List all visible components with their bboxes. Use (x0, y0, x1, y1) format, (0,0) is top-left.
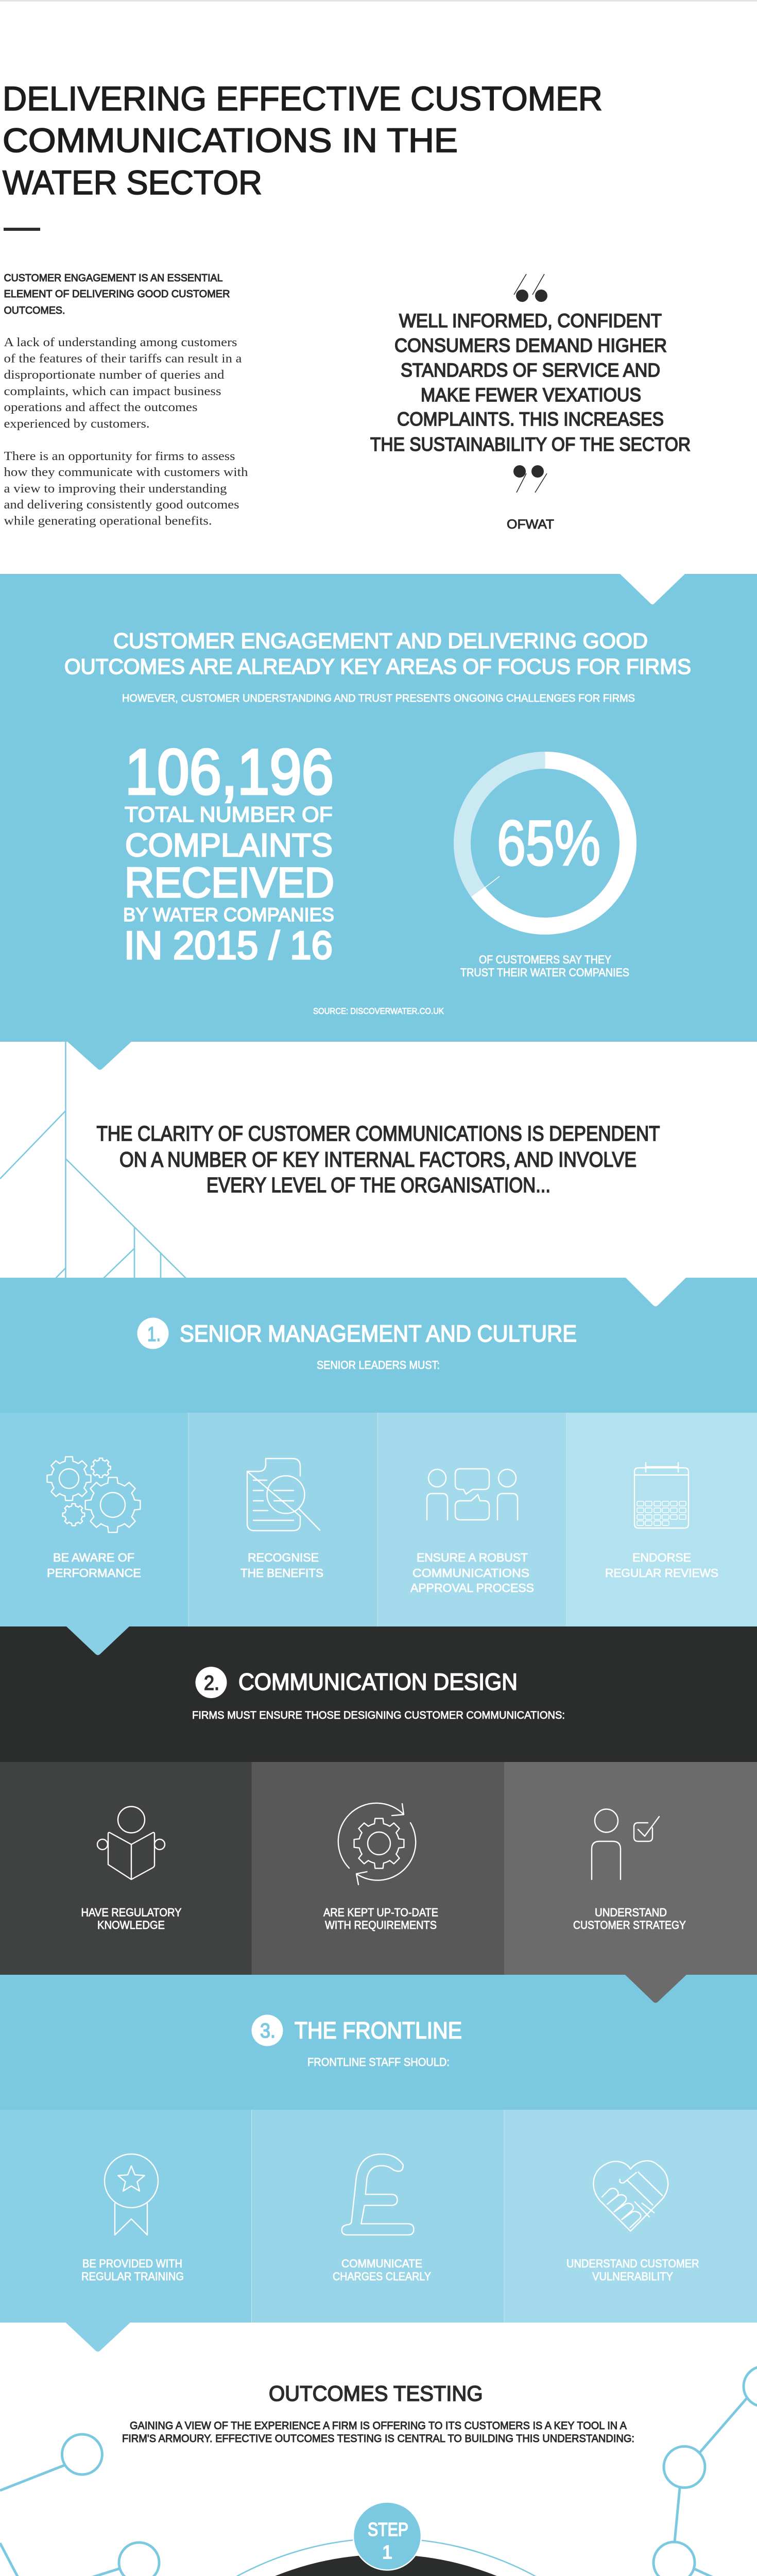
intro text block: how they communicate with customers with (4, 466, 248, 479)
intro text block (4, 273, 248, 528)
icon: number 2: 2. (204, 1672, 219, 1694)
donut chart: 65%: TRUST THEIR WATER COMPANIES (460, 966, 629, 979)
card: endorse regular reviews: REGULAR REVIEWS (605, 1566, 718, 1580)
panel: senior management and culture (0, 1277, 757, 1627)
complaints statistic: RECEIVED (125, 859, 334, 906)
complaints statistic (123, 737, 334, 968)
icon: number 3: 3. (260, 2020, 276, 2042)
complaints statistic: TOTAL NUMBER OF (125, 802, 333, 826)
card: robust approval process: ENSURE A ROBUST (417, 1551, 528, 1564)
icon: people in conversation (427, 1469, 518, 1520)
card: be aware of performance: BE AWARE OF (53, 1551, 134, 1564)
heading: outcomes testing: FIRM'S ARMOURY. EFFECTIVE OUTCOMES TESTING IS CENTRAL TO BUILDING THIS UNDERSTANDING: (122, 2433, 634, 2445)
title: DELIVERING EFFECTIVE CUSTOMER (3, 79, 603, 117)
icon: document with magnifier (247, 1459, 320, 1531)
card: recognise the benefits: RECOGNISE (248, 1551, 319, 1564)
quote: MAKE FEWER VEXATIOUS (421, 384, 641, 405)
icon: number 1: 1. (147, 1323, 161, 1346)
card: be aware of performance (0, 1413, 188, 1627)
heading: CUSTOMER ENGAGEMENT AND DELIVERING GOOD (113, 629, 648, 653)
card: recognise the benefits: THE BENEFITS (240, 1566, 323, 1580)
text block: clarity statement: ON A NUMBER OF KEY INTERNAL FACTORS, AND INVOLVE (119, 1148, 636, 1172)
quote: WELL INFORMED, CONFIDENT (399, 310, 662, 331)
wedge: step 1 (211, 2554, 561, 2576)
card: kept up to date (251, 1762, 504, 1975)
intro text block: There is an opportunity for firms to assess (4, 450, 235, 463)
intro text block: operations and affect the outcomes (4, 401, 197, 414)
card: robust approval process (377, 1413, 566, 1627)
icon: calendar (634, 1463, 689, 1528)
quote: CONSUMERS DEMAND HIGHER (394, 335, 667, 356)
card: kept up to date: WITH REQUIREMENTS (325, 1919, 437, 1931)
card: endorse regular reviews (566, 1413, 757, 1627)
step 1 badge: 1 (382, 2541, 392, 2563)
intro text block: experienced by customers. (4, 417, 149, 431)
card: regulatory knowledge: KNOWLEDGE (97, 1919, 165, 1931)
card: robust approval process: COMMUNICATIONS (412, 1566, 529, 1580)
complaints statistic: COMPLAINTS (125, 827, 333, 863)
card: customer vulnerability (504, 2110, 757, 2323)
card: regulatory knowledge (0, 1762, 251, 1975)
donut chart: 65% (460, 760, 629, 979)
icon: number 3 (251, 2014, 283, 2046)
intro text block: disproportionate number of queries and (4, 368, 225, 382)
quote: COMPLAINTS. THIS INCREASES (397, 409, 664, 430)
text block: clarity statement (97, 1122, 660, 1197)
card: customer strategy: CUSTOMER STRATEGY (573, 1919, 686, 1931)
step 1 badge: STEP (368, 2519, 408, 2540)
complaints statistic: BY WATER COMPANIES (123, 904, 334, 925)
intro text block: ELEMENT OF DELIVERING GOOD CUSTOMER (4, 289, 230, 300)
heading: COMMUNICATION DESIGN (238, 1669, 518, 1695)
intro text block: of the features of their tariffs can result in a (4, 352, 242, 366)
text block: clarity statement: EVERY LEVEL OF THE ORGANISATION... (207, 1173, 550, 1197)
card: regular training: BE PROVIDED WITH (82, 2257, 182, 2270)
complaints statistic: 106,196 (125, 737, 334, 808)
card: customer vulnerability: UNDERSTAND CUSTOMER (566, 2257, 699, 2270)
icon: person with checkbox (592, 1809, 659, 1879)
icon: opening quote marks (514, 274, 547, 302)
card: be aware of performance: PERFORMANCE (47, 1566, 141, 1580)
quote (370, 274, 691, 532)
icon: heart handshake (593, 2161, 668, 2231)
card: regular training (0, 2110, 251, 2351)
panel: communication design: FIRMS MUST ENSURE THOSE DESIGNING CUSTOMER COMMUNICATIONS: (192, 1709, 565, 1721)
panel: senior management and culture: SENIOR LEADERS MUST: (317, 1359, 440, 1371)
card: communicate charges: CHARGES CLEARLY (333, 2270, 431, 2283)
panel: communication design (0, 1626, 757, 1975)
intro text block: and delivering consistently good outcomes (4, 498, 239, 512)
card: regular training: REGULAR TRAINING (81, 2270, 184, 2283)
panel: the frontline: FRONTLINE STAFF SHOULD: (307, 2056, 450, 2069)
card: customer vulnerability: VULNERABILITY (592, 2270, 673, 2283)
heading: SENIOR MANAGEMENT AND CULTURE (180, 1320, 577, 1347)
icon: rosette (105, 2154, 158, 2235)
icon: closing quote marks (513, 465, 547, 493)
text block: clarity statement: THE CLARITY OF CUSTOMER COMMUNICATIONS IS DEPENDENT (97, 1122, 660, 1145)
title (3, 79, 603, 201)
quote: OFWAT (507, 517, 554, 532)
icon: number 1 (137, 1318, 169, 1349)
intro text block: A lack of understanding among customers (4, 336, 237, 349)
donut chart: 65%: OF CUSTOMERS SAY THEY (479, 953, 611, 966)
card: regulatory knowledge: HAVE REGULATORY (81, 1906, 181, 1919)
panel: the frontline (0, 1975, 757, 2351)
intro text block: while generating operational benefits. (4, 515, 212, 528)
heading: THE FRONTLINE (295, 2018, 462, 2044)
card: kept up to date: ARE KEPT UP-TO-DATE (323, 1906, 438, 1919)
icon: pound sign (342, 2154, 414, 2235)
icon: person reading (97, 1806, 165, 1879)
title: WATER SECTOR (3, 163, 262, 201)
title: COMMUNICATIONS IN THE (3, 121, 458, 159)
quote: STANDARDS OF SERVICE AND (401, 360, 660, 381)
card: robust approval process: APPROVAL PROCESS (410, 1581, 534, 1595)
heading: HOWEVER, CUSTOMER UNDERSTANDING AND TRUST PRESENTS ONGOING CHALLENGES FOR FIRMS (122, 692, 635, 704)
heading (64, 629, 691, 704)
heading: OUTCOMES ARE ALREADY KEY AREAS OF FOCUS FOR FIRMS (64, 654, 691, 679)
card: endorse regular reviews: ENDORSE (632, 1551, 691, 1564)
heading: outcomes testing: OUTCOMES TESTING (269, 2381, 483, 2405)
card: recognise the benefits (188, 1413, 377, 1627)
step 1 badge (353, 2502, 421, 2570)
chart: key stages wheel (56, 2502, 720, 2576)
intro text block: complaints, which can impact business (4, 385, 221, 398)
card: communicate charges (251, 2110, 504, 2323)
card: customer strategy: UNDERSTAND (595, 1906, 667, 1919)
intro text block: OUTCOMES. (4, 305, 65, 316)
intro text block: CUSTOMER ENGAGEMENT IS AN ESSENTIAL (4, 273, 222, 284)
card: communicate charges: COMMUNICATE (341, 2257, 422, 2270)
icon: number 2 (196, 1667, 227, 1698)
donut chart: 65%: 65% (497, 808, 600, 879)
heading: outcomes testing (122, 2381, 634, 2445)
icon: gears (47, 1457, 140, 1532)
icon: gear with cycle arrows (338, 1803, 416, 1885)
card: customer strategy (504, 1762, 757, 1975)
panel: key areas of focus: SOURCE: DISCOVERWATER.CO.UK (313, 1006, 444, 1016)
intro text block: a view to improving their understanding (4, 482, 227, 496)
panel: key areas of focus (0, 573, 757, 1070)
heading: outcomes testing: GAINING A VIEW OF THE EXPERIENCE A FIRM IS OFFERING TO ITS CUSTOMERS IS A KEY TOOL IN A (130, 2420, 627, 2432)
outer ring with arrows (73, 2538, 699, 2576)
complaints statistic: IN 2015 / 16 (124, 924, 333, 968)
quote: THE SUSTAINABILITY OF THE SECTOR (370, 434, 691, 455)
